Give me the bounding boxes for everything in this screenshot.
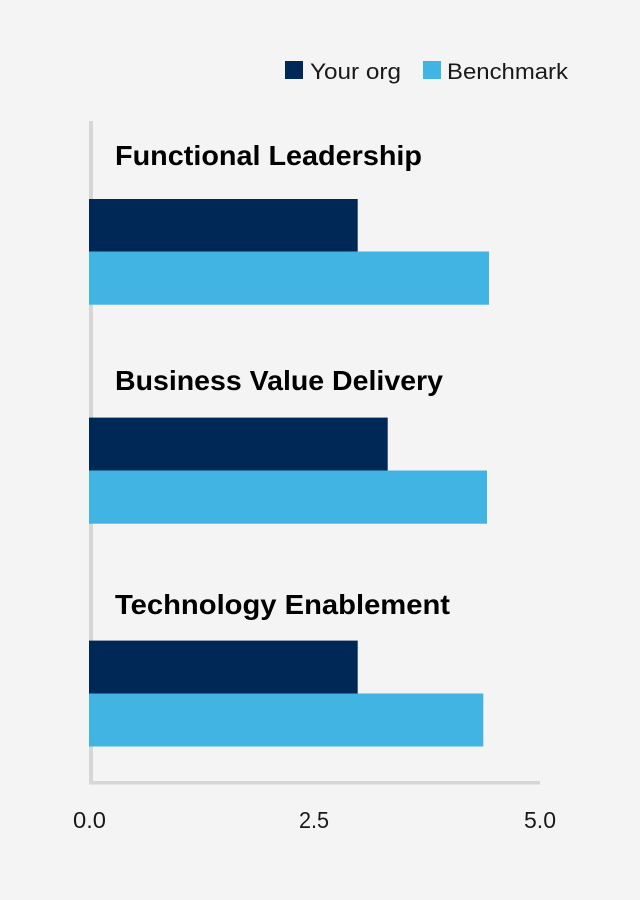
tick label 0.0: 0.0 — [73, 807, 106, 833]
bar: your org — [89, 199, 358, 252]
group: technology enablement — [89, 589, 483, 746]
axis labels — [73, 807, 556, 833]
bar: benchmark — [89, 470, 487, 524]
bar: your org — [89, 641, 358, 694]
bar: benchmark — [89, 252, 489, 305]
tick label 2.5: 2.5 — [299, 807, 329, 833]
legend swatch: benchmark — [423, 61, 441, 79]
group: business value delivery — [89, 365, 487, 524]
legend label: benchmark: Benchmark — [447, 59, 569, 84]
group: functional leadership — [89, 140, 489, 305]
heading: functional leadership: Functional Leadership — [115, 140, 422, 171]
legend — [285, 59, 569, 84]
bar: benchmark — [89, 694, 483, 746]
chart axes — [89, 121, 540, 784]
heading: technology enablement: Technology Enablement — [115, 589, 450, 620]
bar: your org — [89, 418, 388, 471]
legend label: your org: Your org — [310, 59, 401, 84]
legend swatch: your org — [285, 61, 303, 79]
tick label 5.0: 5.0 — [524, 807, 556, 833]
heading: business value delivery: Business Value Delivery — [115, 365, 443, 396]
